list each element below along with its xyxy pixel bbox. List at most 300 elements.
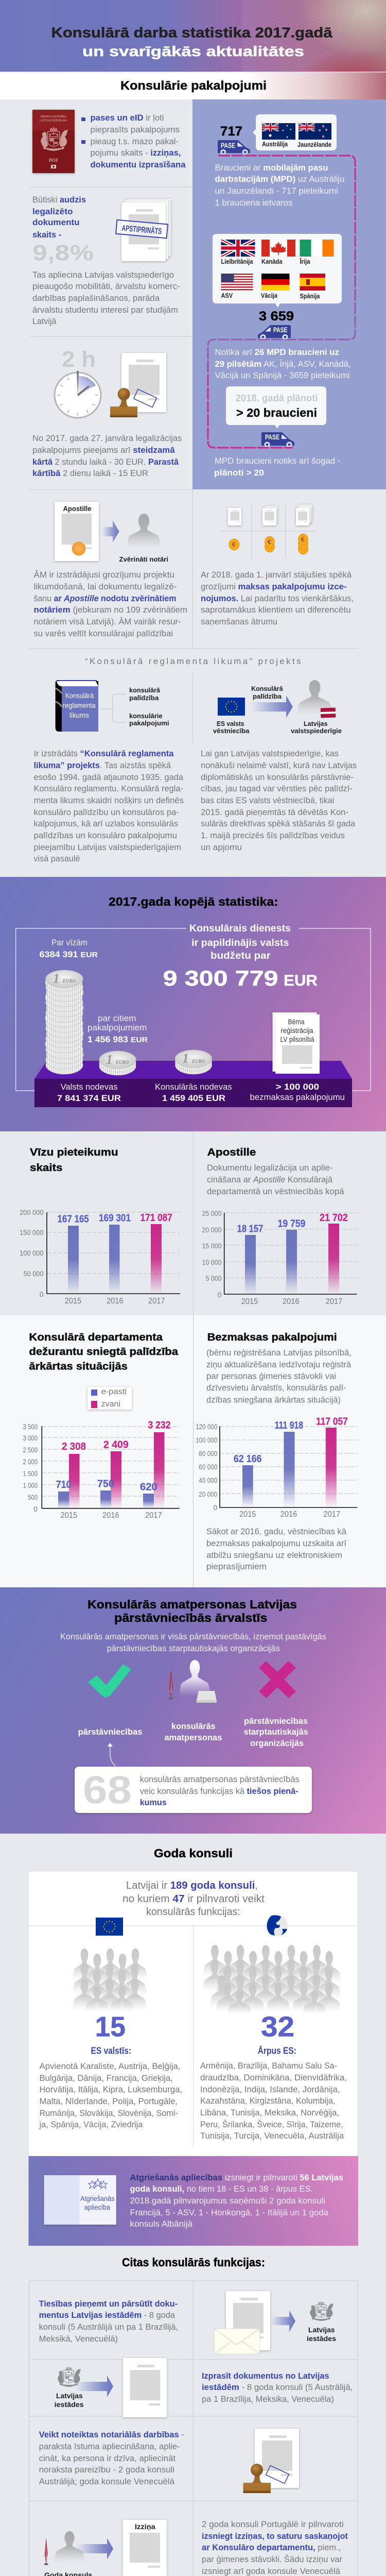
bar chart: apostille: 5 000 [206,1274,222,1282]
text block: paid services changes: saprotamākus klientiem un diferencētu [201,605,351,615]
icon: return certificate: Atgriešanās [80,2194,114,2202]
diagram: EU embassy helps Latvian citizens [213,680,342,735]
text block: apostille description: departamentā un vēstniecībās kopā [207,1187,344,1196]
text block: notarial actions 1: Veikt noteiktas notariālās darbības - [39,2430,184,2439]
text block: requesting documents: pa 1 Brazīlija, Meksika, Venecuēla) [202,2395,334,2404]
text block: legalised documents growth: legalizēto [32,207,73,216]
text block: consular directive [201,749,357,852]
bar chart: duty officers: 2 409 [103,1439,129,1451]
text block: apostille amendments: likumdošanā, lai dokumentu legalizē- [34,582,177,591]
text block: regulation project: menta likums skaidri nošķirs un definēs [34,796,184,805]
text block: regulation project: Konsulāro reglamentu. Konsulārā regla- [34,784,183,793]
header banner [0,0,386,106]
panel: mobile passport stations background [192,99,386,489]
heading: honorary consuls: Goda konsuli [154,1846,233,1860]
text block: regulation project: pieejamību Latvijas valstspiederīgajiem [34,843,181,852]
text block: apostille amendments [34,570,187,638]
heading: visa applications: Vīzu pieteikumu [30,1147,118,1158]
text block: paid services changes: saņemšanas ātrumu [201,617,277,626]
icon: law book: likums [69,711,89,719]
text block: honorary consul intro: konsulārās funkcijas: [146,1906,240,1918]
text block: free services note: bezmaksas pakalpojumu uzskaita arī [206,1539,346,1548]
text block: MPD trips to Australia [215,163,345,208]
platform [34,1061,352,1107]
text block: platform labels: 7 841 374 EUR [57,1093,121,1103]
text block: regulation project: kalpojumus, kā arī uzlabos konsulārās [34,819,178,828]
text block: forwarding documents [39,2299,178,2344]
text block: passport services: pieprasīts pakalpojums [91,125,180,134]
icon: child registration document: Bērna [288,1018,305,1026]
text block: non-EU countries: Peru, Šrilanka, Šveice, Sīrija, Taizeme, [200,2120,343,2129]
bar chart: duty officers: 500 [28,1493,38,1501]
heading: apostille: Apostille [207,1147,256,1158]
text block: return certificates: 2018.gadā pilnvarojumus saņēmuši 2 goda konsuli [130,2196,325,2206]
panel: honorary consuls card [29,1871,358,2156]
title: Konsulārā darba statistika 2017.gadā [51,25,332,41]
bar chart: visa applications: 100 000 [20,1249,44,1257]
bar chart: duty officers: 2015 [61,1511,77,1520]
callout: six country flags: Īrija [300,258,310,265]
text block: urgent legalisation: No 2017. gada 27. janvāra legalizācijas [32,434,182,443]
icon: honorary consul issues certificate [44,2520,167,2576]
text block: requesting documents: iestādēm - 8 goda konsuli (5 Austrālijā, [202,2383,353,2392]
text block: urgent legalisation [32,434,182,478]
text block: 26 MPD trips: Vācijā un Spānijā - 3659 pieteikumi [215,371,350,380]
text block: other services income: par citiem [98,1014,136,1023]
callout: Australia and New Zealand flags [253,114,337,150]
text block: return certificates: goda konsuli, no tiem 18 - ES un 38 - ārpus ES. [130,2184,313,2194]
text block: MPD trips to Australia: un Jaunzēlandi - 717 pieteikumi [215,187,338,196]
text block: non-EU countries: draudzība, Dominikāna, Dienvidāfrika, [200,2073,347,2082]
text block: MPD plans: MPD braucieni notiks arī šogad - [215,456,341,466]
diagram: law branches: konsulārā [129,686,161,694]
callout: six country flags [213,234,342,308]
bar chart: visa applications: 200 000 [20,1208,44,1216]
bar chart: visa applications: 0 [40,1290,44,1298]
text block: mobility explanation: pieaugošo mobilitāti, ārvalstu komerc- [32,282,180,291]
text block: non-EU countries: Indonēzija, Indija, Islande, Jordānija, [200,2085,340,2094]
bar chart: free services: 100 000 [196,1436,217,1444]
text block: other services income: 1 456 983 EUR [87,1035,148,1044]
bar chart: free services: 62 166 [234,1453,261,1465]
text block: non-EU countries: Libāna, Tunisija, Meksika, Norvēģija, [200,2108,339,2117]
text block: budget total: ir papildinājis valsts [191,938,289,948]
icon: return certificate [44,2175,116,2225]
text block: free services description: (bērnu reģistrēšana Latvijas pilsonībā, [206,1348,352,1358]
text block: regulation project: visā pasaulē [34,854,80,863]
heading: other consular functions: Citas konsulārās funkcijas: [122,2256,265,2269]
callout: Australia and New Zealand flags: Austrālija [262,140,288,148]
text block: regulation project [34,749,184,863]
bar chart: duty officers: 2 500 [23,1446,38,1454]
diagram: EU embassy helps Latvian citizens: vēstniecība [213,727,250,735]
icon: passport: PASE [49,158,58,163]
text block: MPD plans: plānoti > 20 [214,468,264,478]
stat: 3 659 with van: 3 659 [259,309,294,324]
text block: officers description: pārstāvniecības starptautiskajās organizācijās [107,1644,280,1653]
bar chart: apostille: 2017 [326,1297,342,1306]
text block: visa income: 6384 391 EUR [39,950,98,959]
text block: urgent legalisation: kārtā 2 stundu laikā - 30 EUR. Parastā [32,457,179,467]
text block: notarial actions 1: Austrālijā; goda konsule Venecuēlā [39,2477,175,2486]
icon: check mark [88,1664,131,1697]
panel: 2017 overall statistics [0,877,386,1131]
callout: 68 consular officers: konsulārās amatpersonas pārstāvniecībās [140,1775,300,1784]
bar chart: apostille: 10 000 [202,1258,222,1266]
text block: free services note: Sākot ar 2016. gadu, vēstniecības kā [206,1527,347,1536]
text block: notarial actions 1: paraksta īstuma apliecināšana, aplie- [39,2442,180,2451]
text block: apostille description: cināšana ar Apostille Konsulārajā [207,1175,333,1184]
text block: consular directive: un apjomu [201,843,242,852]
bar chart: visa applications: 169 301 [99,1213,131,1224]
panel: consular officers in missions [0,1587,386,1834]
text block: paid services changes: Ar 2018. gada 1. janvārī stājušies spēkā [201,570,352,580]
icon: approved document stack: APSTIPRINĀTS [121,223,162,236]
text block: non-EU countries [200,2046,347,2141]
text block: legalised documents growth: skaits - [32,230,61,240]
callout: 2018 planned trips: 2018. gadā plānoti [236,393,318,404]
bar chart: free services: 120 000 [196,1422,217,1431]
icon: EU flag [96,1918,123,1936]
text block: column labels: amatpersonas [165,1733,222,1742]
text block: forwarding documents: mentus Latvijas iestādēm - 8 goda [39,2311,176,2320]
text block: free services description: par personas ģimenes stāvokli vai [206,1372,336,1381]
text block: apostille description [207,1163,344,1196]
text block: EU countries: Malta, Nīderlande, Polija, Portugāle, [39,2097,178,2106]
text block: EU countries: Rumānija, Slovākija, Slovēnija, Somi- [39,2109,178,2118]
bar chart: duty officers: 710 [56,1479,72,1490]
text block: issuing certificates: 2 goda konsuli Portugālē ir pilnvaroti [202,2520,344,2529]
icon: clock [55,371,101,418]
bar chart: visa applications: 2015 [65,1297,81,1306]
text block: regulation project: palīdzības un konsulāro pakalpojumu [34,831,177,840]
bar chart: duty officers [23,1420,180,1520]
text block: consular directive: bas citas ES valsts vēstniecībā, tikai [201,796,335,805]
text block: free services note: pieprasījumiem [206,1562,267,1571]
bar chart: free services: 2015 [239,1510,256,1519]
diagram: law branches: konsulārie [129,712,163,720]
text block: regulation project: esošo 1994. gadā atjaunoto 1935. gada [34,773,184,782]
icon: small coin stack 1 [99,1051,136,1075]
text block: MPD trips to Australia: darbstacijām (MPD) uz Austrāliju [215,175,345,184]
diagram: law branches [100,686,169,727]
text block: platform labels [57,1082,345,1103]
callout: six country flags: Vācija [261,292,278,299]
bar chart: free services: 2017 [323,1510,340,1519]
text block: issuing certificates: par ģimenes stāvokli. Šādu izziņu var [202,2554,342,2564]
text block: apostille amendments: su varēs veltīt konsulārajai palīdzībai [34,629,173,638]
bar chart: apostille: 18 157 [237,1224,263,1235]
text block: return certificates: Atgriešanās apliecības izsniegt ir pilnvaroti 56 Latvijas [130,2173,343,2182]
icon: document with stamp [110,353,166,417]
text block: return certificates: Francijā, 5 - ASV, 1 - Honkongā, 1 - Itālijā un 1 goda [130,2208,329,2217]
bar chart: free services: 117 057 [316,1416,348,1428]
heading: free services: Bezmaksas pakalpojumi [207,1332,337,1343]
bar chart: apostille: 20 000 [202,1226,222,1234]
heading: duty officers: ārkārtas situācijās [29,1361,128,1372]
callout: Australia and New Zealand flags: Jaunzēlande [297,141,331,148]
bar chart: free services: 80 000 [199,1449,217,1458]
text block: other services income: pakalpojumiem [87,1023,147,1032]
heading: 2017 statistics: 2017.gada kopējā statistika: [109,895,278,908]
bar chart: apostille: 15 000 [202,1242,222,1250]
text block: budget total: EUR [284,972,318,989]
text block: return certificates: konsuls Albānijā [130,2219,193,2229]
text block: non-EU countries: Armēnija, Brazīlija, Bahamu Salu Sa- [200,2061,337,2071]
text block: EU countries: Apvienotā Karaliste, Austrija, Beļģija, [39,2062,180,2071]
bar chart: free services: 40 000 [199,1476,217,1484]
stat: 3 659 with van: PASE [273,326,288,334]
text block: forwarding documents: konsuli (5 Austrālijā un pa 1 Brazīlijā, [39,2323,178,2332]
heading: konsulārie pakalpojumi: Konsulārie pakalpojumi [120,79,267,93]
text block: consular directive: 2015. gadā pieņemtās tā dēvētās Kon- [201,808,348,817]
icon: globe [267,1915,288,1936]
title [51,25,332,59]
text block: MPD trips to Australia: Braucieni ar mobilajām pasu [215,163,328,173]
text block: issuing certificates: izsniegt izziņas, to saturu saskaņojot [202,2532,348,2541]
bar chart: duty officers: 2 308 [62,1441,86,1452]
heading: consular officers: pārstāvniecībās ārvalstīs [114,1611,267,1624]
stat: 717 with van: PASE [221,141,235,149]
text block: MPD plans [214,456,341,478]
icon: cross mark [259,1661,296,1698]
icon: passport: EIROPAS SAVIENĪBA [41,115,66,118]
text block: 26 MPD trips [215,348,351,380]
icon: tall coin stack [45,970,83,1074]
bar chart: duty officers: 3 500 [23,1422,38,1431]
bar chart: free services: 60 000 [199,1463,217,1471]
text block: honorary consul intro: Latvijai ir 189 goda konsuli, [126,1880,258,1891]
bar chart: duty officers: 2017 [145,1511,162,1520]
text block: platform labels: 1 459 405 EUR [162,1093,225,1103]
bar chart: visa applications: 2016 [107,1297,124,1306]
bar chart: free services: 20 000 [199,1490,217,1498]
heading: visa applications [30,1147,118,1174]
text block: issuing certificates: izsniegt arī goda konsule Venecuēlā [202,2567,341,2576]
stat: 717 with van: 717 [220,124,242,139]
text block: apostille amendments: notāriem (jebkuram no 109 zvērinātiem [34,605,187,615]
icon: documents and coins grid [220,504,317,558]
stat: 717 with van [218,124,250,155]
text block: officers description: Konsulārās amatpersonas ir visās pārstāvniecībās, izņemot pastāvīgās [60,1632,326,1641]
bar chart: visa applications: 171 087 [141,1212,172,1224]
heading: consular officers [87,1598,297,1624]
number: 32: 32 [261,2011,294,2043]
text block: consular directive: cības, jau tagad var vērsties pēc palīdzī- [201,784,353,793]
legend: e-pasti [101,1387,127,1396]
bar chart: apostille: 25 000 [202,1209,222,1217]
icon: documents and coins grid: € [232,541,236,548]
diagram: EU embassy helps Latvian citizens: valstspiederīgie [291,727,342,735]
callout: 68 consular officers: kumus [140,1798,167,1807]
bar chart: free services [196,1416,358,1519]
text block: issuing certificates [202,2520,348,2576]
bar chart: apostille: 19 759 [278,1218,306,1230]
text block: free services description: dzības sniegšana ārkārtas situācijā) [206,1396,341,1405]
callout: six country flags: Kanāda [261,258,283,265]
bar chart: duty officers: 750 [97,1479,114,1490]
text block: EU countries: Horvātija, Itālija, Kipra, Luksemburga, [39,2085,182,2094]
diagram: EU embassy helps Latvian citizens: ES valsts [217,720,244,727]
heading: duty officers [29,1332,179,1372]
icon: passport [32,110,75,173]
icon: consular officer with flag [169,1660,217,1703]
callout: six country flags: ASV [221,292,233,299]
text block: paid services changes [201,570,354,626]
bar chart: duty officers: 3 232 [148,1420,171,1431]
text block: forwarding documents: Meksikā, Venecuēlā) [39,2334,118,2344]
callout: 68 consular officers: 68 [83,1769,132,1812]
number: 15: 15 [95,2011,126,2043]
number: 2 h: 2 h [62,347,96,372]
text block: legalised documents growth: Būtiski audzis [32,195,86,205]
text block: return certificates [130,2173,343,2229]
text block: consular directive: Lai gan Latvijas valstspiederīgie, kas [201,749,339,758]
text block: passport services: pieaug t.s. mazo pakal- [91,137,179,146]
bar chart: free services: 0 [214,1503,218,1512]
text block: notarial actions 1: noraksta pareizību - 2 goda konsuli [39,2465,174,2475]
bar chart: duty officers: 620 [140,1482,157,1493]
text block: mobility explanation: Tas apliecina Latvijas valstspiederīgo [32,270,174,280]
bar chart: duty officers: 2 000 [23,1458,38,1466]
text block: regulation project: Ir izstrādāts “Konsulārā reglamenta [34,749,174,758]
icon: passport: LATVIJAS REPUBLIKA [40,119,67,123]
text block: regulation project: likuma” projekts. Tas aizstās spēkā [34,761,171,770]
icon: child registration document [273,1012,320,1074]
text block: column labels [78,1716,308,1748]
text block: budget total [163,923,318,990]
text block: requesting documents: Izprasīt dokumentus no Latvijas [202,2371,329,2381]
text block: consular directive: 1. maijā precizēs šīs palīdzības veidus [201,831,345,840]
bar chart: apostille: 2015 [241,1297,258,1306]
panel: return certificates [29,2156,358,2246]
text block: consular directive: sulārās direktīvas spēkā stāšanās šī gada [201,819,356,828]
bar chart: apostille [202,1209,358,1306]
title: un svarīgākās aktualitātes [82,43,304,59]
icon: small coin stack 1: 1 [106,1052,113,1067]
diagram: law branches: pakalpojumi [129,719,169,727]
icon: envelope and document to institutions: Latvijas [308,2326,335,2334]
bar chart: apostille: 21 702 [320,1212,348,1224]
text block: notarial actions 1 [39,2430,184,2486]
callout: 2018 planned trips: > 20 braucieni [236,406,317,419]
text block: non-EU countries: Ārpus ES: [258,2046,296,2056]
icon: law book: reglamenta [63,701,96,709]
text block: 26 MPD trips: Notika arī 26 MPD braucieni uz [215,348,339,357]
bar chart: visa applications: 150 000 [20,1228,44,1236]
text block: column labels: pārstāvniecības [244,1716,308,1726]
heading: consular regulation law project: “Konsulārā reglamenta likuma” projekts [85,656,301,666]
text block: passport services [81,113,186,170]
icon: honorary consul issues certificate: Izziņa [135,2522,155,2531]
callout: 68 consular officers [75,1767,312,1813]
text block: visa income: Par vīzām [51,938,87,947]
bar chart: visa applications: 167 165 [58,1214,89,1225]
text block: apostille amendments: notāriem visā Latvijā). ĀM vairāk resur- [34,617,181,626]
text block: free services description: ziņu aktualizēšana Iedzīvotaju reģistrā [206,1360,352,1369]
text block: legalised documents growth: dokumentu [32,218,79,227]
text block: mobility explanation [32,270,180,326]
dashed route line [208,156,355,448]
text block: platform labels: Valsts nodevas [61,1082,118,1092]
text block: urgent legalisation: kārtībā 2 dienu laikā - 15 EUR [32,469,148,478]
icon: van 2018: PASE [265,433,279,441]
text block: platform labels: Konsulārās nodevas [155,1082,232,1092]
text block: regulation project: konsulāro palīdzību un konsulāros pa- [34,808,179,817]
callout: 2018 planned trips [226,386,326,429]
text block: platform labels: bezmaksas pakalpojumu [250,1093,345,1102]
icon: approved document stack [116,199,171,261]
text block: mobility explanation: darbības paplašināšanos, parāda [32,294,160,303]
icon: documents and coins grid: € [301,536,305,543]
text block: non-EU countries: Tunisija, Turcija, Venecuēla, Austrālija [200,2131,344,2141]
callout: six country flags: Lielbritānija [221,258,253,265]
heading: duty officers: dežurantu sniegtā palīdzība [29,1346,179,1358]
text block: notarial actions 1: cināt, ka persona ir dzīva, apliecināt [39,2454,176,2463]
text block: column labels: pārstāvniecības [78,1727,142,1737]
icon: institutions to document: iestādes [55,2400,84,2409]
text block: visa income [39,938,98,959]
diagram: law branches: palīdzība [129,694,159,702]
text block: mobility explanation: ārvalstu studentu interesi par studijām [32,306,178,315]
text block: passport services: pases un eID ir ļoti [91,113,164,123]
bar chart: duty officers: 0 [33,1505,38,1513]
text block: paid services changes: grozījumi maksas pakalpojumu izce- [201,582,347,591]
callout: six country flags: Spānija [300,292,320,300]
text block: officers description [60,1632,326,1653]
diagram: EU embassy helps Latvian citizens: Latvijas [304,720,328,727]
icon: small coin stack 2: EURO [191,1059,205,1064]
bar chart: apostille: 0 [218,1291,222,1299]
text block: 26 MPD trips: 29 pilsētām AK, Īrijā, ASV, Kanādā, [215,360,351,369]
text block: budget total: 9 300 779 [163,966,278,990]
icon: child registration document: LV pilsonībā [280,1035,314,1043]
icon: documents and coins grid: € [268,538,271,546]
callout: 68 consular officers: veic konsulārās funkcijas kā tiešos pienā- [140,1787,299,1796]
text block: passport services: dokumentu izprasīšana [91,160,186,170]
text block: paid services changes: nojumos. Lai padarītu tos vienkāršākus, [201,594,354,603]
icon: crowd of 15 consuls [73,1948,147,2011]
icon: tall coin stack: EURO [62,978,76,984]
text block: non-EU countries: Kazahstāna, Kirgizstāna, Kolumbija, [200,2096,335,2106]
text block: budget total: Konsulārais dienests [189,923,291,934]
legend: zvani [101,1400,120,1409]
icon: law book [56,680,98,732]
diagram: EU embassy helps Latvian citizens: Konsulārā [251,685,283,692]
icon: small coin stack 2: 1 [182,1051,189,1066]
heading: duty officers: Konsulārā departamenta [29,1332,163,1343]
text block: consular directive: nonākuši nelaimē valstī, kurā nav Latvijas [201,761,357,770]
bar chart: visa applications [20,1208,180,1306]
diagram: EU embassy helps Latvian citizens: palīdzība [253,692,282,700]
stat: 3 659 with van [258,309,294,340]
number: 9,8%: 9,8% [32,241,94,265]
icon: envelope and document to institutions: iestādes [307,2334,336,2343]
icon: institutions to document: Latvijas [56,2392,83,2400]
bar chart: duty officers: 3 000 [23,1434,38,1442]
icon: apostille document to notaries: Zvērināti notāri [119,555,168,563]
icon: apostille document to notaries [55,502,168,563]
icon: law book: Konsulārā [65,691,94,700]
text block: budget total: budžetu par [210,951,271,961]
bar chart: visa applications: 50 000 [24,1269,44,1278]
icon: institutions to document [55,2358,167,2417]
text block: column labels: organizācijās [250,1738,304,1748]
bar chart: visa applications: 2017 [148,1297,165,1306]
text block: other services income [87,1014,148,1044]
text block: issuing certificates: ar Konsulāro departamentu, piem., [202,2543,341,2552]
bar chart: free services: 2016 [280,1510,297,1519]
